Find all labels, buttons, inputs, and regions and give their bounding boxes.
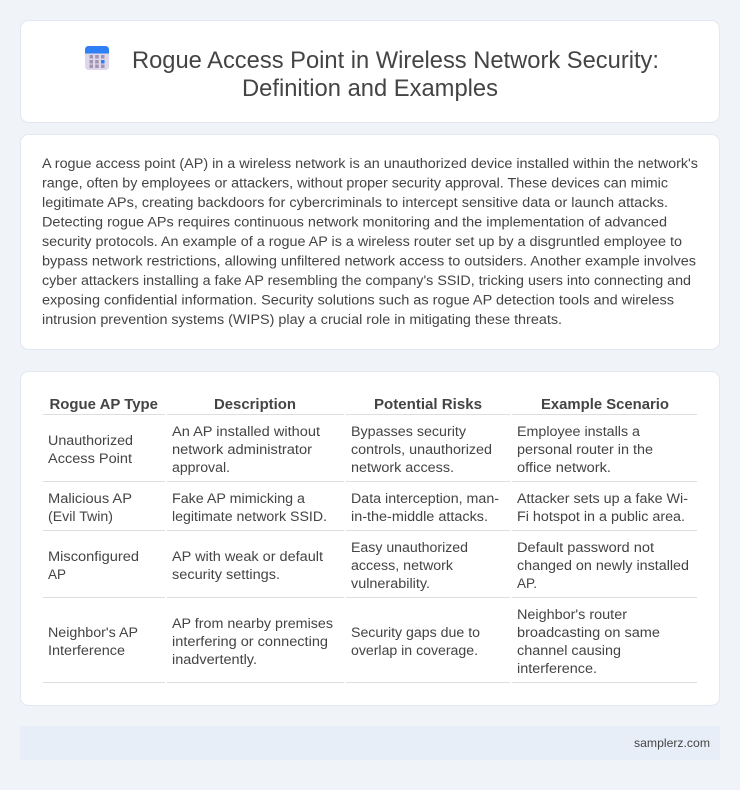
table row: neighbor's AP interference: Neighbor's router: [517, 607, 627, 623]
text block: introduction paragraph: bypass network restrictions, allowing unfiltered network access to outsiders. Another example involves: [42, 254, 696, 270]
table row: unauthorized access point: [48, 424, 653, 476]
table row: neighbor's AP interference: inadvertently.: [172, 652, 257, 668]
table row: neighbor's AP interference: broadcasting on same: [517, 625, 660, 641]
panel: table: [20, 372, 720, 706]
text block: introduction paragraph: security protocols. An example of a rogue AP is a wireless router set up by a disgruntled employee to: [42, 234, 682, 250]
table row: neighbor's AP interference: Security gaps due to: [351, 625, 480, 641]
table row: neighbor's AP interference: [48, 607, 660, 677]
table row: misconfigured AP: Easy unauthorized: [351, 540, 468, 556]
table row: misconfigured AP: [48, 540, 689, 592]
table row: unauthorized access point: Bypasses security: [351, 424, 467, 440]
table row: malicious AP: Data interception, man-: [351, 491, 499, 507]
table header row: Rogue AP Type: [50, 396, 158, 413]
table row: unauthorized access point: controls, unauthorized: [351, 442, 492, 458]
table row: unauthorized access point: An AP installed without: [172, 424, 320, 440]
table row: neighbor's AP interference: interfering or connecting: [172, 634, 328, 650]
table row: neighbor's AP interference: AP from nearby premises: [172, 616, 333, 632]
table row: unauthorized access point: Access Point: [48, 451, 132, 467]
table row: malicious AP: Fake AP mimicking a: [172, 491, 305, 507]
table row: unauthorized access point: Employee installs a: [517, 424, 640, 440]
table row: misconfigured AP: changed on newly installed: [517, 558, 689, 574]
table row: misconfigured AP: access, network: [351, 558, 454, 574]
table row: neighbor's AP interference: interference.: [517, 661, 597, 677]
table row: unauthorized access point: office network.: [517, 460, 611, 476]
table row: misconfigured AP: Default password not: [517, 540, 654, 556]
table row: unauthorized access point: network access.: [351, 460, 454, 476]
title: Definition and Examples: [242, 75, 498, 102]
table header row: Example Scenario: [541, 396, 669, 413]
title: [132, 47, 659, 102]
table row: unauthorized access point: personal router in the: [517, 442, 653, 458]
icon: calendar: [85, 46, 109, 70]
table row: neighbor's AP interference: channel causing: [517, 643, 621, 659]
table row: misconfigured AP: AP.: [517, 576, 537, 592]
panel: introduction: [20, 134, 720, 350]
table row: misconfigured AP: vulnerability.: [351, 576, 430, 592]
table row: malicious AP: Malicious AP: [48, 491, 132, 507]
table row: misconfigured AP: AP: [48, 567, 66, 583]
text block: introduction paragraph: Detecting rogue APs requires continuous network monitoring and the implementation of advanced: [42, 214, 667, 230]
table row: malicious AP: Fi hotspot in a public area.: [517, 509, 685, 525]
table header row: Description: [214, 396, 296, 413]
table row: unauthorized access point: Unauthorized: [48, 433, 133, 449]
table header row: Potential Risks: [374, 396, 482, 413]
table row: malicious AP: (Evil Twin): [48, 509, 113, 525]
text block: introduction paragraph: exposing confidential information. Security solutions such as rogue AP detection tools and wireless: [42, 292, 674, 308]
table row: misconfigured AP: security settings.: [172, 567, 280, 583]
text block: introduction paragraph: legitimate APs, creating backdoors for cybercriminals to intercept sensitive data or launch attacks.: [42, 195, 668, 211]
text block: introduction paragraph: range, often by employees or attackers, without proper security approval. These devices can mimic: [42, 176, 668, 192]
table row: unauthorized access point: network administrator: [172, 442, 312, 458]
table row: malicious AP: in-the-middle attacks.: [351, 509, 488, 525]
text block: introduction paragraph: [42, 156, 698, 328]
table row: unauthorized access point: approval.: [172, 460, 230, 476]
text block: introduction paragraph: A rogue access point (AP) in a wireless network is an unauthorized device installed within the network's: [42, 156, 698, 172]
table row: malicious AP: legitimate network SSID.: [172, 509, 327, 525]
title: Rogue Access Point in Wireless Network Security:: [132, 47, 659, 74]
table row: neighbor's AP interference: Interference: [48, 643, 125, 659]
text block: introduction paragraph: intrusion prevention systems (WIPS) play a crucial role in mitigating these threats.: [42, 312, 562, 328]
table row: neighbor's AP interference: Neighbor's AP: [48, 625, 138, 641]
table row: misconfigured AP: Misconfigured: [48, 549, 139, 565]
footer: [20, 726, 720, 760]
panel: header: [20, 20, 720, 122]
table header row: [50, 396, 669, 413]
table row: malicious AP: [48, 491, 688, 525]
table row: misconfigured AP: AP with weak or default: [172, 549, 323, 565]
text block: introduction paragraph: cyber attackers installing a fake AP resembling the company's SSID, tricking users into connecting and: [42, 273, 691, 289]
table row: malicious AP: Attacker sets up a fake Wi-: [517, 491, 688, 507]
footer: samplerz.com: [634, 736, 710, 750]
table row: neighbor's AP interference: overlap in coverage.: [351, 643, 478, 659]
